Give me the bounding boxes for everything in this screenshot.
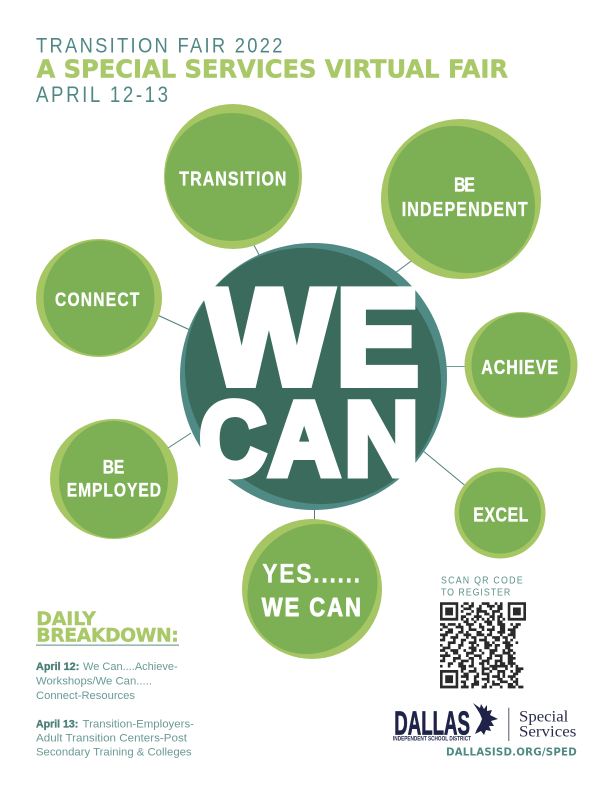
circle: Transition: [164, 104, 302, 249]
logo subline: INDEPENDENT SCHOOL DISTRICT: [393, 736, 471, 742]
schedule: April 13: Transition-Employers-: [82, 719, 194, 731]
circle: Excel: [454, 468, 546, 558]
circle: Connect: CONNECT: [55, 288, 140, 310]
schedule: April 13: Secondary Training & Colleges: [36, 747, 192, 759]
headline: WE: W: [206, 261, 333, 413]
title line: A Special Services Virtual Fair: A SPECIAL SERVICES VIRTUAL FAIR: [36, 54, 508, 84]
schedule: April 13: [36, 719, 194, 759]
circle: Be Employed: BE: [103, 456, 124, 478]
schedule: April 12: Workshops/We Can.....: [36, 675, 152, 687]
logo wordmark: DALLAS: [394, 705, 470, 742]
headline: CAN: A: [268, 381, 340, 498]
website URL: DALLASISD.ORG/SPED: [446, 748, 577, 759]
daily breakdown heading: DAILY: [36, 609, 96, 630]
QR code caption: [441, 575, 523, 599]
circle: Excel: EXCEL: [473, 504, 528, 526]
circle: Yes We Can: [221, 497, 404, 681]
department name: Special: [519, 709, 568, 726]
headline: WE: E: [336, 261, 419, 413]
circle: Achieve: [464, 312, 578, 418]
connector lines: [153, 238, 472, 526]
daily breakdown heading: BREAKDOWN:: [36, 625, 179, 646]
headline: CAN: C: [199, 381, 266, 498]
schedule: April 12: [36, 661, 178, 702]
title line: April 12-13: APRIL 12-13: [36, 84, 168, 107]
circle: Be Employed: EMPLOYED: [67, 479, 161, 501]
schedule: April 12: Connect-Resources: [36, 690, 135, 702]
schedule: April 13: Adult Transition Centers-Post: [36, 733, 188, 745]
schedule: April 13: April 13:: [36, 719, 78, 731]
schedule: April 12: April 12:: [36, 661, 79, 673]
daily breakdown heading: [36, 609, 179, 646]
circle: Achieve: ACHIEVE: [481, 356, 558, 378]
QR code caption: SCAN QR CODE: [441, 575, 523, 587]
circle: Be Employed: [50, 419, 178, 539]
QR code caption: TO REGISTER: [441, 587, 510, 599]
schedule: April 12: We Can....Achieve-: [83, 661, 178, 673]
circle: Be Independent: BE: [454, 174, 475, 196]
central circle: We Can: [132, 195, 494, 557]
circle: Connect: [36, 239, 162, 357]
circle: Be Independent: [358, 96, 565, 303]
Dallas ISD logo: [393, 703, 576, 742]
title block: [36, 34, 508, 107]
circle: Transition: TRANSITION: [179, 168, 287, 190]
circle: Yes We Can: YES......: [262, 559, 360, 589]
Dallas ISD logo: Services: [519, 724, 576, 741]
circle: Be Independent: INDEPENDENT: [402, 198, 528, 220]
circle: Yes We Can: WE CAN: [262, 593, 361, 622]
headline: CAN: N: [344, 381, 419, 498]
title line: Transition Fair 2022: TRANSITION FAIR 2022: [36, 34, 283, 58]
QR code: [440, 604, 526, 687]
icon: sunburst crescent: [473, 703, 498, 735]
